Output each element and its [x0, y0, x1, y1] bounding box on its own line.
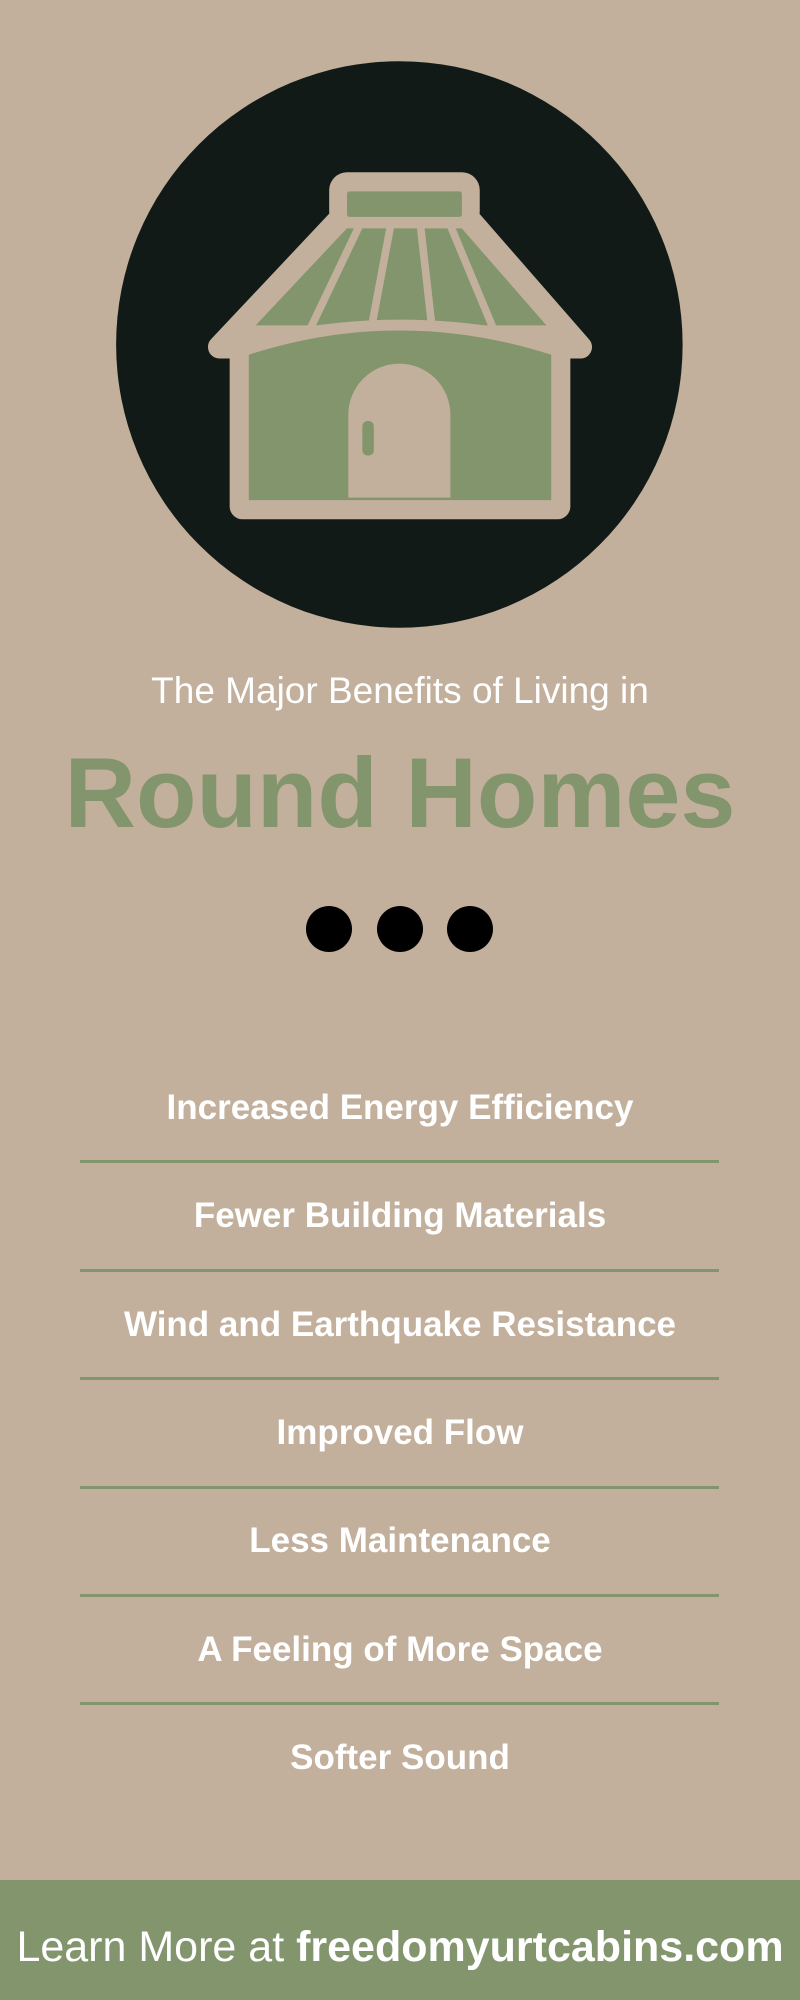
item 3: Wind and Earthquake Resistance	[124, 1305, 676, 1344]
item 4: Improved Flow	[277, 1413, 523, 1452]
item 5: Less Maintenance	[249, 1521, 551, 1560]
item 6: A Feeling of More Space	[197, 1630, 603, 1669]
title: Round Homes	[64, 737, 736, 848]
item 1: Increased Energy Efficiency	[167, 1088, 633, 1127]
icon: yurt house in dark circle	[116, 61, 683, 628]
item 7: Softer Sound	[290, 1738, 510, 1777]
footer: Learn More at freedomyurtcabins.com	[16, 1923, 784, 1971]
decorative dots	[306, 906, 493, 952]
footer	[0, 1880, 800, 2000]
subtitle: The Major Benefits of Living in	[151, 670, 649, 711]
list: benefits	[80, 1088, 719, 1777]
item 2: Fewer Building Materials	[194, 1196, 606, 1235]
